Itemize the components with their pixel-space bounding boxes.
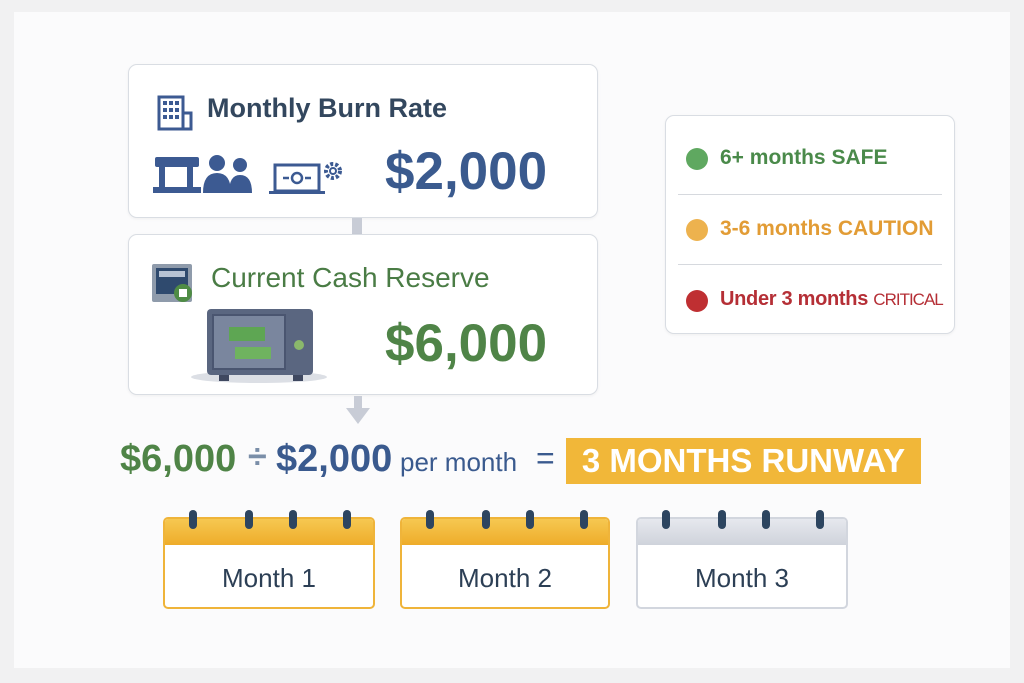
connector — [352, 218, 362, 234]
heading: current cash reserve: Current Cash Reserve — [211, 262, 490, 293]
callout: 3 months runway: 3 MONTHS RUNWAY — [582, 442, 905, 479]
legend: caution: 3-6 months CAUTION — [720, 217, 934, 240]
calendar: month 3: Month 3 — [695, 563, 789, 593]
equation: per month — [400, 447, 517, 477]
panel: current cash reserve — [128, 234, 598, 395]
equation: $6,000 — [120, 438, 236, 480]
calendar: month 3 — [636, 517, 848, 609]
legend: safe: 6+ months SAFE — [720, 146, 887, 169]
icons: expenses — [153, 155, 342, 194]
calendar: month 2: Month 2 — [458, 563, 552, 593]
calendar: month 1 — [163, 517, 375, 609]
arrow: down — [346, 396, 370, 424]
calendar: month 2 — [400, 517, 610, 609]
panel: legend — [665, 115, 955, 334]
legend: critical: Under 3 months CRITICAL — [720, 288, 943, 310]
icon: register — [152, 264, 192, 302]
calendar: month 1: Month 1 — [222, 563, 316, 593]
heading: monthly burn rate: Monthly Burn Rate — [207, 93, 447, 123]
equation — [120, 438, 921, 484]
value: $2,000: $2,000 — [385, 142, 547, 201]
value: $6,000: $6,000 — [385, 314, 547, 373]
equation: = — [536, 440, 555, 476]
icon: safe — [191, 309, 327, 383]
icon: building — [158, 96, 192, 130]
equation: $2,000 — [276, 438, 392, 480]
panel: monthly burn rate — [128, 64, 598, 218]
equation: ÷ — [248, 438, 267, 476]
